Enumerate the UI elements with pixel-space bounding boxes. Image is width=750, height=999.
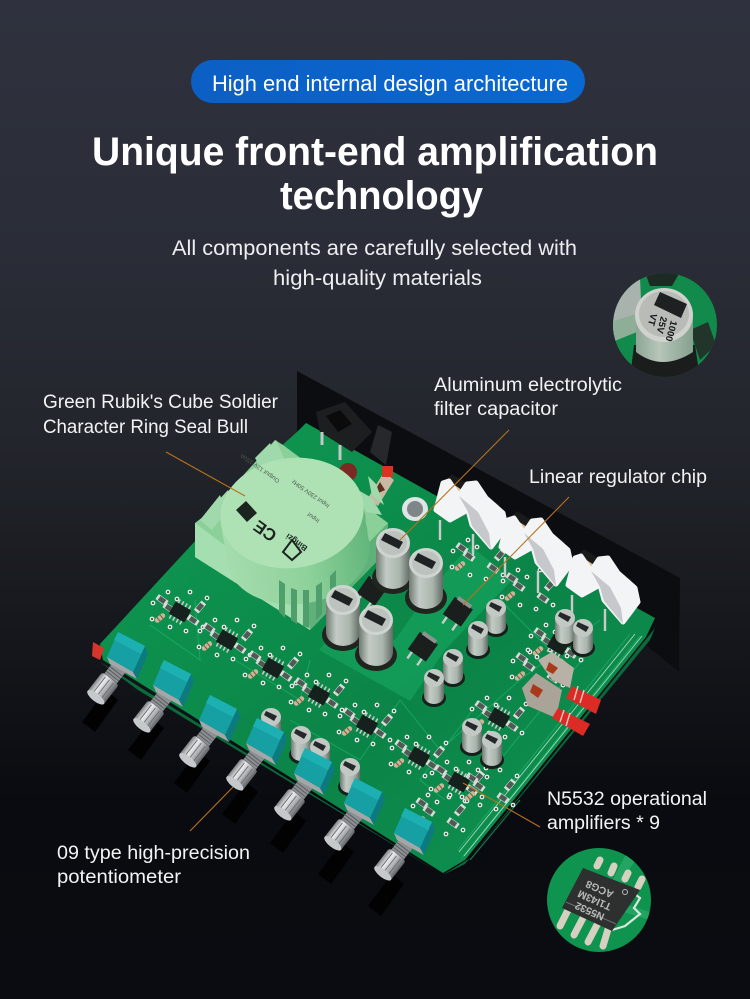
- label: op-amps: [547, 789, 707, 834]
- regulators: [352, 573, 475, 668]
- op-amp chips: [167, 598, 571, 796]
- badge: section tag: [191, 60, 585, 103]
- inset: capacitor close-up: [613, 273, 717, 377]
- knob shadows: [82, 690, 404, 916]
- title: technology: [280, 174, 484, 218]
- badge: section tag: High end internal design architecture: [212, 71, 568, 96]
- label: potentiometer: 09 type high-precision: [57, 843, 250, 864]
- left amplifier components: [150, 538, 587, 836]
- transformer: [195, 440, 388, 630]
- red LED: [92, 642, 104, 660]
- rear metal panel: [297, 371, 680, 672]
- title: [92, 130, 658, 218]
- label: op-amps: amplifiers * 9: [547, 813, 660, 834]
- inset: N5532 chip close-up: N5532: [573, 899, 606, 923]
- transformer markings: [240, 452, 331, 523]
- inset: N5532 chip close-up: ACG8: [584, 877, 616, 900]
- label: capacitor: [434, 375, 622, 420]
- label: op-amps: N5532 operational: [547, 789, 707, 810]
- inset: N5532 chip close-up: [547, 848, 651, 952]
- large electrolytic capacitors: [322, 528, 447, 671]
- transformer: Bingzi: [284, 532, 309, 553]
- title: Unique front-end amplification: [92, 130, 658, 174]
- terminal block: [316, 402, 394, 506]
- label: regulator: Linear regulator chip: [529, 467, 707, 488]
- board traces: [150, 600, 640, 860]
- transformer markings: Input 230V 50Hz: [291, 478, 331, 508]
- inset: capacitor close-up: 1000: [663, 319, 679, 342]
- subtitle: [172, 237, 577, 290]
- label: transformer: Green Rubik's Cube Soldier: [43, 392, 279, 413]
- inset: capacitor close-up: 25V: [654, 315, 669, 335]
- transformer markings: Output 12V 15VA: [240, 452, 281, 483]
- transformer fins: [279, 570, 336, 628]
- callout lines: [166, 430, 569, 831]
- potentiometers: [85, 632, 435, 883]
- label: potentiometer: potentiometer: [57, 867, 182, 888]
- raised power supply area: [319, 545, 512, 701]
- inset: N5532 chip close-up: T1I43M: [576, 887, 613, 912]
- disc capacitor: [402, 497, 428, 521]
- small capacitors: [259, 599, 595, 796]
- subtitle: All components are carefully selected with: [172, 237, 577, 260]
- inset: capacitor close-up: VT: [645, 312, 659, 327]
- label: capacitor: Aluminum electrolytic: [434, 375, 622, 396]
- transformer: CE: [250, 516, 280, 545]
- label: potentiometer: [57, 843, 250, 888]
- label: capacitor: filter capacitor: [434, 399, 559, 420]
- transformer markings: Input: [307, 511, 321, 523]
- subtitle: high-quality materials: [273, 267, 482, 290]
- label: transformer: Character Ring Seal Bull: [43, 417, 248, 438]
- selector switches: [522, 652, 601, 736]
- circuit board: [100, 423, 655, 875]
- white RCA connectors: [436, 474, 638, 631]
- label: transformer: [43, 392, 279, 438]
